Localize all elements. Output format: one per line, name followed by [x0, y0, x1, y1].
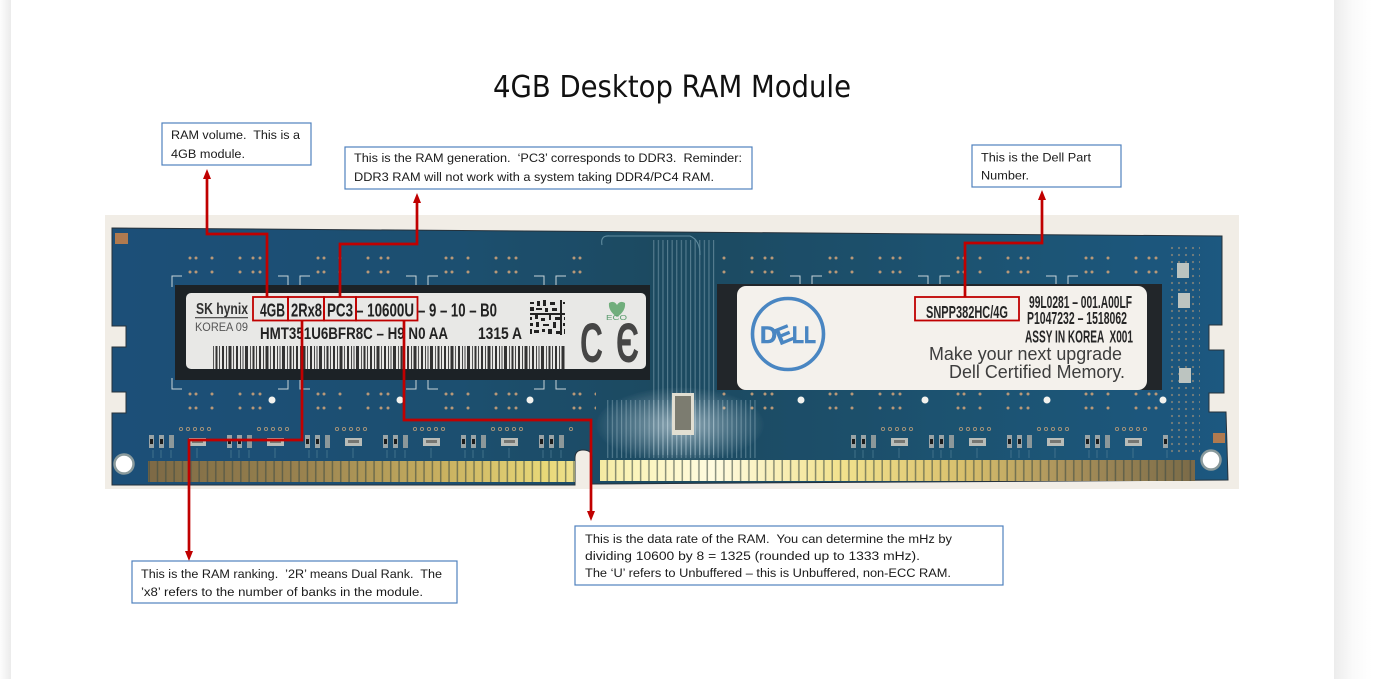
callout: data rate: dividing 10600 by 8 = 1325 (rounded up to 1333 mHz).	[585, 549, 920, 563]
Dell label	[737, 286, 1147, 390]
callout: data rate: This is the data rate of the RAM. You can determine the mHz by	[585, 532, 953, 546]
Dell label: ASSY IN KOREA X001	[1025, 326, 1133, 346]
Dell label: E	[772, 320, 797, 351]
red highlight boxes	[253, 297, 1019, 320]
SK hynix label: PC3	[327, 300, 353, 320]
callout: Dell part number: This is the Dell Part	[981, 150, 1092, 164]
chip behind left label	[175, 285, 650, 380]
title: 4GB Desktop RAM Module	[493, 70, 851, 105]
white silkscreen brackets	[170, 275, 1160, 392]
mounting holes	[114, 233, 1225, 474]
SK hynix label: HMT351U6BFR8C – H9 N0 AA	[260, 324, 448, 343]
Dell label: Dell Certified Memory.	[949, 362, 1125, 382]
callout: RAM ranking: ’x8’ refers to the number of banks in the module.	[141, 585, 423, 599]
SK hynix label: SK hynix	[196, 301, 248, 318]
callout: RAM volume	[162, 123, 311, 165]
central traces	[595, 236, 765, 463]
callout: RAM ranking	[132, 561, 457, 603]
circuit board	[112, 228, 1228, 485]
arrow: 10600U to data rate	[404, 320, 595, 521]
callout: data rate	[575, 526, 1003, 585]
arrow: 2Rx8 to RAM ranking	[185, 320, 302, 561]
callout: RAM generation: DDR3 RAM will not work with a system taking DDR4/PC4 RAM.	[354, 170, 714, 184]
SK hynix label: 2Rx8	[291, 300, 322, 320]
callout: data rate: The ‘U’ refers to Unbuffered – this is Unbuffered, non-ECC RAM.	[585, 566, 951, 580]
arrow: PC3 to RAM generation	[340, 193, 421, 297]
callout: RAM volume: RAM volume. This is a	[171, 128, 300, 142]
photo background	[105, 215, 1239, 489]
SK hynix label: ECO	[606, 315, 628, 322]
SK hynix label: KOREA 09	[195, 320, 248, 334]
arrow: 4GB to RAM volume	[203, 169, 267, 297]
Dell label: D	[760, 322, 777, 349]
chip behind right label	[717, 284, 1162, 390]
via dots	[186, 252, 1160, 412]
Dell label: Make your next upgrade	[929, 344, 1122, 364]
gold contact fingers	[148, 460, 1195, 482]
SK hynix label	[186, 293, 646, 374]
SK hynix label: 1315 A	[478, 324, 522, 343]
Dell label: SNPP382HC/4G	[926, 302, 1008, 322]
callout: Dell part number: Number.	[981, 168, 1029, 182]
Dell label: LL	[792, 322, 816, 349]
callout: Dell part number	[972, 145, 1121, 187]
callout: RAM generation: This is the RAM generation. ‘PC3’ corresponds to DDR3. Reminder:	[354, 151, 742, 165]
SK hynix label: – 9 – 10 – B0	[418, 300, 497, 320]
SK hynix label: C	[580, 311, 603, 374]
callout: RAM volume: 4GB module.	[171, 147, 245, 161]
callout: RAM generation	[345, 147, 752, 189]
surface components	[145, 243, 1200, 459]
SK hynix label: Є	[616, 311, 639, 374]
callout: RAM ranking: This is the RAM ranking. ’2R’ means Dual Rank. The	[141, 567, 442, 581]
arrow: Dell part number	[965, 190, 1046, 297]
SK hynix label: – 10600U	[356, 300, 414, 320]
Dell label: 99L0281 – 001.A00LF	[1029, 292, 1132, 312]
SK hynix label: 4GB	[260, 300, 285, 320]
photo: RAM module	[105, 215, 1239, 489]
Dell label: P1047232 – 1518062	[1027, 308, 1127, 328]
